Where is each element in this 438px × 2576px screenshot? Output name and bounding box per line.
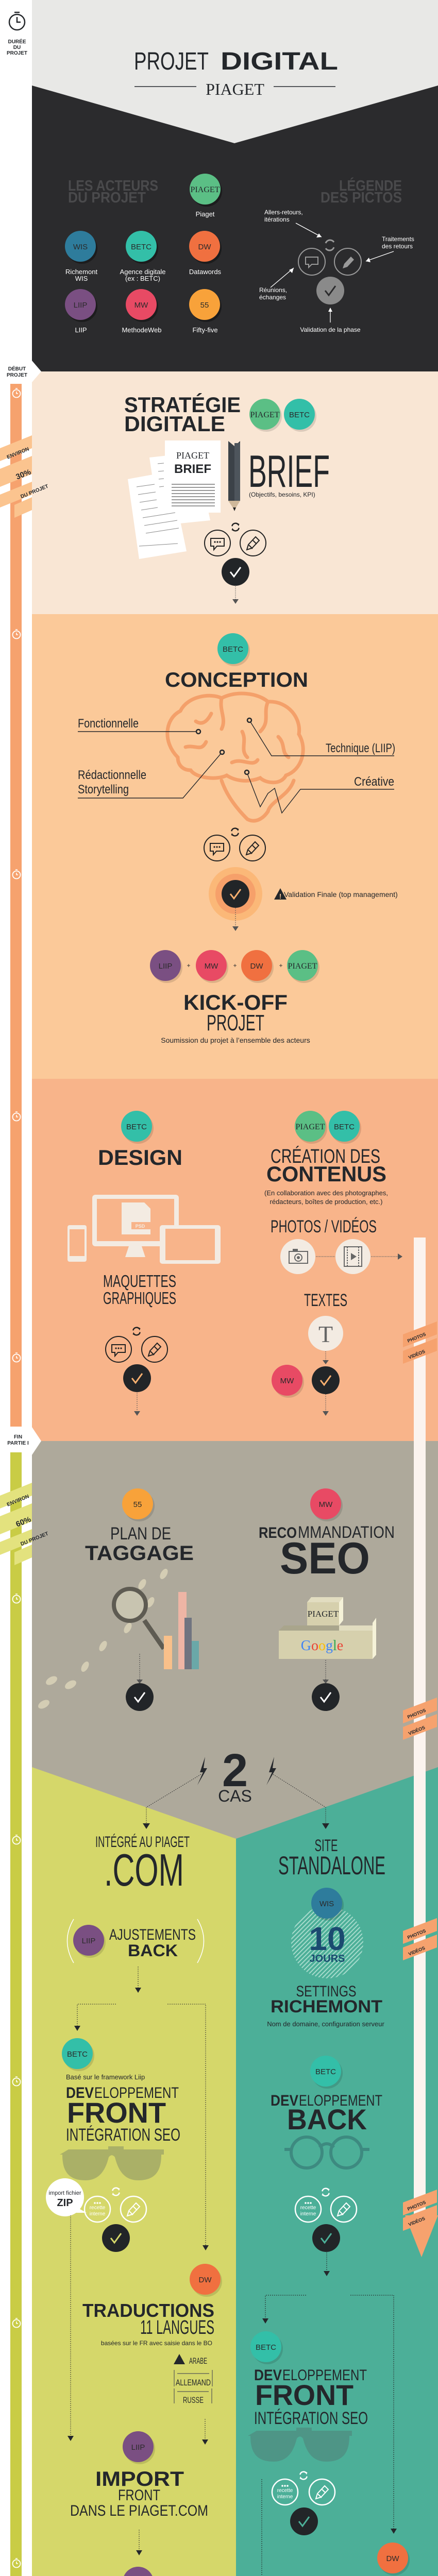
logo: piaget header: PIAGET (206, 80, 264, 98)
10 jours badge: JOURS (310, 1953, 345, 1964)
panel: recommandation seo: SEO (280, 1534, 370, 1583)
ribbon: environ 30%: 30% (14, 468, 32, 482)
legend pictos: Réunions, (259, 286, 287, 294)
panel: creation des contenus: PHOTOS / VIDÉOS (271, 1217, 377, 1236)
heading: 2 cas: CAS (218, 1787, 252, 1805)
panel: integre au piaget.com: .COM (104, 1844, 184, 1895)
panel: plan de taggage: TAGGAGE (85, 1542, 194, 1565)
actors grid: WIS (73, 243, 88, 251)
panel: import front: IMPORT (95, 2468, 184, 2490)
label: debut projet: PROJET (7, 372, 27, 378)
actor: betc conception: BETC (223, 645, 243, 654)
title: PROJET (134, 48, 209, 75)
panel: integre au piaget.com: Basé sur le framework Liip (66, 2073, 145, 2081)
right strip: photos videos timeline: VIDÉOS (408, 1349, 426, 1360)
panel: site standalone (267, 1836, 385, 2028)
panel: traductions left: RUSSE (183, 2395, 204, 2405)
panel: traductions left: ARABE (189, 2356, 207, 2366)
panel: creation des contenus: PIAGET (296, 1123, 325, 1131)
label: duree du projet (7, 38, 27, 56)
icon: round glasses (284, 2137, 369, 2168)
illustration: brief documents: BRIEF (174, 462, 211, 476)
actors: kick-off: MW (205, 962, 218, 971)
panel: developpement front right (248, 2331, 368, 2535)
actors grid: WIS (75, 275, 88, 282)
actors: kick-off: DW (250, 962, 263, 971)
panel: design: GRAPHIQUES (103, 1289, 176, 1308)
panel: creation des contenus: BETC (334, 1123, 355, 1131)
label: duree du projet: DU (13, 45, 21, 50)
ajustements back: BACK (128, 1941, 178, 1960)
label: fin partie I (7, 1434, 29, 1446)
icons: photo video (280, 1239, 402, 1274)
panel: traductions left: basées sur le FR avec saisie dans le BO (101, 2340, 212, 2347)
actors: kick-off: + (279, 962, 283, 969)
heading: strategie digitale: STRATÉGIE (124, 393, 241, 417)
illustration: footprints magnifier bars (37, 1567, 170, 1710)
icon: stopwatch duree (9, 12, 25, 30)
callout: validation finale (274, 888, 398, 900)
right strip: photos videos timeline: VIDÉOS (408, 1945, 426, 1957)
panel: traductions left: ALLEMAND (176, 2378, 211, 2387)
labels: conception types: Fonctionnelle (78, 717, 139, 731)
heading: strategie digitale: DIGITALE (124, 412, 225, 436)
title: DIGITAL (221, 48, 338, 75)
label: fin partie I: FIN (14, 1434, 22, 1440)
actors grid: Richemont (65, 268, 97, 276)
heading: kick-off projet: PROJET (207, 1010, 264, 1036)
illustration: brief documents (128, 440, 221, 559)
illustration: brain (167, 693, 303, 821)
callout: validation finale: ! (279, 892, 281, 900)
panel: traductions left: TRADUCTIONS (82, 2300, 214, 2321)
icon: sunglasses teal (248, 2428, 352, 2462)
icon: sunglasses (60, 2146, 164, 2180)
pictos: conception (204, 828, 265, 931)
heading: 2 cas (143, 1745, 329, 1829)
actors grid: Fifty-five (192, 326, 218, 334)
heading: kick-off projet: KICK-OFF (183, 990, 288, 1014)
heading: kick-off projet (161, 990, 310, 1044)
label: duree du projet: PROJET (7, 50, 27, 56)
title (134, 48, 338, 75)
panel: developpement front right: INTÉGRATION SEO (254, 2409, 368, 2428)
actors grid: 55 (200, 301, 209, 310)
label: debut projet (7, 365, 27, 378)
heading: 2 cas: 2 (222, 1745, 248, 1797)
actors grid: (ex : BETC) (125, 275, 160, 282)
ribbon: environ 30%: ENVIRON (6, 446, 30, 461)
actors grid: Piaget (196, 210, 215, 218)
panel: site standalone: Nom de domaine, configuration serveur (267, 2020, 384, 2028)
heading: strategie digitale (124, 393, 241, 436)
panel: developpement front right: BETC (256, 2343, 276, 2352)
illustration: podium google: Google (301, 1638, 343, 1654)
actors grid: Datawords (189, 268, 222, 276)
panel: creation des contenus: CONTENUS (266, 1162, 386, 1186)
panel: import front: DANS LE PIAGET.COM (70, 2502, 208, 2519)
actors grid (65, 174, 222, 334)
right strip: photos videos timeline: PHOTOS (407, 2199, 427, 2212)
actors: piaget betc strategie (249, 399, 316, 432)
ribbon: environ 60%: DU PROJET (20, 1531, 49, 1547)
panel: import front (70, 2431, 208, 2555)
panel: traductions right (271, 2543, 410, 2576)
ajustements back (67, 1919, 204, 1963)
panel: creation des contenus: MW (280, 1377, 294, 1385)
panel: plan de taggage: PLAN DE (110, 1524, 171, 1544)
actors: kick-off: + (233, 962, 237, 969)
panel: creation des contenus: (En collaboration avec des photographes, (264, 1189, 388, 1197)
text: brief: (Objectifs, besoins, KPI) (249, 491, 315, 498)
panel: developpement back: BACK (287, 2103, 367, 2136)
panel: integration taggage left (84, 2567, 193, 2576)
ajustements back: AJUSTEMENTS (109, 1926, 196, 1943)
label: debut projet: DÉBUT (8, 365, 26, 372)
callout: import zip: ZIP (57, 2197, 73, 2209)
panel: developpement back: DEV (271, 2092, 298, 2109)
heading: les acteurs du projet: DU PROJET (68, 190, 146, 206)
10 jours badge: 10 (309, 1920, 346, 1957)
ajustements back: LIIP (82, 1937, 95, 1945)
panel: design: BETC (126, 1123, 147, 1131)
illustration: podium google: PIAGET (308, 1609, 339, 1619)
labels: conception types: Créative (354, 775, 394, 789)
panel: creation des contenus (264, 1111, 402, 1416)
legend pictos: itérations (264, 216, 290, 223)
heading: legende des pictos: LÉGENDE (339, 177, 402, 194)
actors grid: MW (134, 301, 148, 310)
legend pictos: échanges (259, 294, 286, 301)
panel: integre au piaget.com: INTÉGRÉ AU PIAGET (95, 1834, 190, 1851)
actors: kick-off: LIIP (159, 962, 172, 971)
right strip: photos videos timeline: VIDÉOS (408, 2216, 426, 2227)
panel: developpement front right: ELOPPEMENT (282, 2367, 367, 2384)
callout: import zip (46, 2178, 87, 2216)
actors grid: Agence digitale (120, 268, 165, 276)
text: brief (248, 446, 330, 498)
legend pictos: des retours (382, 243, 413, 250)
panel: recommandation seo (259, 1488, 395, 1711)
right strip: photos videos timeline (403, 1238, 438, 2257)
heading: legende des pictos: DES PICTOS (321, 190, 402, 206)
panel: integre au piaget.com: ELOPPEMENT (94, 2084, 179, 2102)
right strip: photos videos timeline: VIDÉOS (408, 1725, 426, 1736)
panel: developpement back: ELOPPEMENT (299, 2092, 382, 2109)
panel: creation des contenus: rédacteurs, boîtes de production, etc.) (270, 1198, 382, 1206)
heading: les acteurs du projet: LES ACTEURS (68, 178, 158, 194)
panel: integre au piaget.com (46, 1834, 209, 2441)
panel: traductions left (82, 2264, 222, 2445)
actor: betc conception (217, 633, 250, 666)
10 jours badge (291, 1888, 363, 1978)
panel: integre au piaget.com: INTÉGRATION SEO (66, 2125, 180, 2145)
ribbon: environ 60% (0, 1483, 49, 1565)
labels: conception types: Technique (LIIP) (326, 741, 395, 755)
ribbon: environ 60%: 60% (14, 1515, 32, 1529)
right strip: photos videos timeline: PHOTOS (407, 1331, 427, 1344)
legend pictos (259, 209, 414, 333)
actors grid: PIAGET (191, 185, 220, 194)
panel: import front: FRONT (118, 2487, 160, 2504)
labels: conception types: Storytelling (78, 783, 129, 796)
panel: traductions left: DW (199, 2276, 212, 2284)
illustration: brief documents: PIAGET (176, 450, 209, 461)
illustration: devices (68, 1195, 221, 1264)
timeline sidebar (10, 361, 41, 2576)
actors: kick-off: + (187, 962, 191, 969)
panel: creation des contenus: TEXTES (304, 1291, 347, 1310)
panel: developpement back: BETC (315, 2067, 336, 2076)
text: brief: BRIEF (248, 446, 330, 497)
actors: kick-off: PIAGET (288, 962, 317, 971)
labels: conception types: Rédactionnelle (78, 768, 146, 782)
heading: conception: CONCEPTION (165, 669, 308, 691)
panel: creation des contenus: T (318, 1321, 333, 1347)
panel: site standalone: SETTINGS (296, 1983, 357, 2000)
heading: legende des pictos (321, 177, 402, 206)
panel: site standalone: RICHEMONT (271, 1997, 382, 2016)
illustration: podium google (279, 1597, 376, 1659)
right strip: photos videos timeline: PHOTOS (407, 1928, 427, 1940)
actors grid: LIIP (74, 301, 87, 310)
panel: plan de taggage (37, 1488, 199, 1711)
panel: site standalone: SITE (314, 1836, 338, 1855)
ribbon: environ 30%: DU PROJET (20, 484, 49, 500)
legend pictos: Validation de la phase (300, 326, 361, 333)
heading: les acteurs du projet (68, 178, 158, 206)
label: duree du projet: DURÉE (8, 38, 26, 45)
panel: integre au piaget.com: BETC (67, 2050, 88, 2059)
panel: developpement front right: FRONT (255, 2379, 353, 2411)
panel: recommandation seo: MMANDATION (298, 1523, 395, 1541)
panel: design (68, 1111, 221, 1416)
pictos: strategie (205, 523, 266, 604)
actors grid: LIIP (75, 326, 87, 334)
illustration: devices: PSD (136, 1224, 145, 1229)
panel: import front: LIIP (131, 2443, 145, 2452)
panel: traductions left: 11 LANGUES (140, 2317, 214, 2338)
legend pictos: Traitements (382, 235, 414, 243)
callout: validation finale: Validation Finale (top management) (284, 890, 398, 899)
legend pictos: Allers-retours, (264, 209, 303, 216)
ribbon: environ 30% (0, 435, 49, 518)
actors: piaget betc strategie: PIAGET (250, 411, 280, 419)
panel: developpement front right: DEV (254, 2367, 282, 2384)
callout: import zip: import fichier (49, 2190, 81, 2196)
actors: kick-off (150, 950, 319, 983)
panel: design: DESIGN (98, 1145, 182, 1170)
actors: piaget betc strategie: BETC (289, 411, 310, 419)
actors grid: DW (198, 243, 211, 251)
icon: pencil (228, 441, 240, 511)
panel: design: MAQUETTES (103, 1272, 176, 1291)
ribbon: environ 60%: ENVIRON (6, 1494, 30, 1508)
labels: conception types (78, 717, 395, 813)
panel: recommandation seo: RECO (259, 1524, 297, 1541)
actors grid: MethodeWeb (122, 326, 162, 334)
panel: traductions right: DW (386, 2554, 399, 2563)
panel: creation des contenus: CRÉATION DES (271, 1145, 380, 1167)
panel: plan de taggage: 55 (133, 1500, 142, 1509)
heading: kick-off projet: Soumission du projet à l’ensemble des acteurs (161, 1036, 310, 1044)
actors grid: BETC (131, 243, 151, 251)
panel: integre au piaget.com: FRONT (67, 2096, 166, 2129)
panel: integre au piaget.com: DEV (66, 2084, 94, 2102)
right strip: photos videos timeline: PHOTOS (407, 1707, 427, 1720)
label: fin partie I: PARTIE I (7, 1440, 29, 1446)
panel: recommandation seo: MW (319, 1500, 333, 1509)
10 jours badge: WIS (319, 1900, 334, 1908)
panel: developpement back (259, 2056, 397, 2576)
